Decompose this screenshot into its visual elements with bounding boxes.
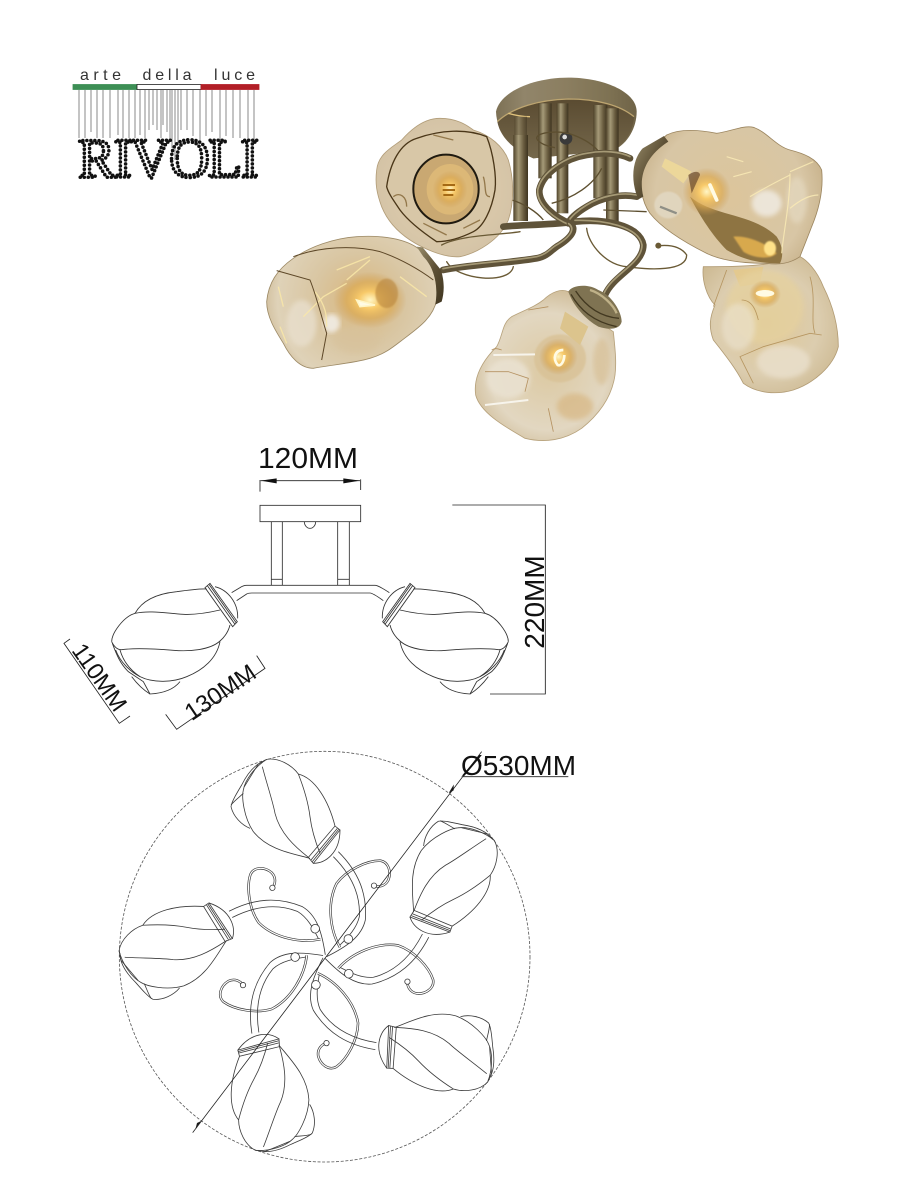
globe and arm: lower right [272,902,517,1155]
outer diameter circle [119,751,530,1162]
side elevation drawing [64,478,545,729]
globe and arm: top [231,759,390,957]
side view fixture [232,505,389,601]
globe and arm: right [296,807,533,1018]
label: 220MM: 220MM [519,555,550,649]
diameter leader line with arrows [193,752,568,1133]
arms [503,222,570,227]
bronze curved arms and wire curls [442,152,687,295]
label: 130MM: 130MM [180,659,261,726]
logo tagline: della [142,67,192,84]
logo tricolour bar [73,84,259,90]
logo tagline: arte [80,67,121,84]
dimension brackets [64,478,545,729]
collar [417,247,444,305]
logo hanging strings [79,90,254,160]
glass shade: rear, facing viewer [376,118,513,257]
bulb nub [304,522,316,528]
glass shade: right rear [703,257,838,393]
label: 120MM: 120MM [258,443,358,475]
logo tagline: luce [214,67,255,84]
left globe outline [112,583,238,694]
globe and arm: left [108,834,345,1046]
glass shade: upper right [633,127,822,264]
collar dome [568,286,622,329]
ceiling plate and stems [496,78,647,222]
canopy width bracket [260,478,361,492]
right globe outline [382,583,508,694]
horizontal arm [232,585,389,601]
logo tagline [80,67,255,84]
support rods [271,522,349,585]
globe and arm: lower left [156,918,400,1172]
collar [633,136,668,199]
label: 110MM: 110MM [67,638,132,716]
plate [496,78,637,158]
logo: Rivoli arte della luce [73,67,259,190]
label: diameter 530MM: Ø530MM [461,750,576,781]
globe depth bracket [64,639,130,723]
wire curls [442,228,687,278]
plan view drawing [108,751,568,1172]
glass shade: left [267,236,444,368]
stems [513,103,619,222]
height bracket [452,505,545,694]
glass shade: bottom centre [475,286,622,441]
logo wordmark RIVOLI: RIVOLI [78,128,259,190]
globe length bracket [166,656,265,729]
canopy [260,505,361,522]
product photo: five-arm ceiling lamp with amber glass [267,78,838,441]
